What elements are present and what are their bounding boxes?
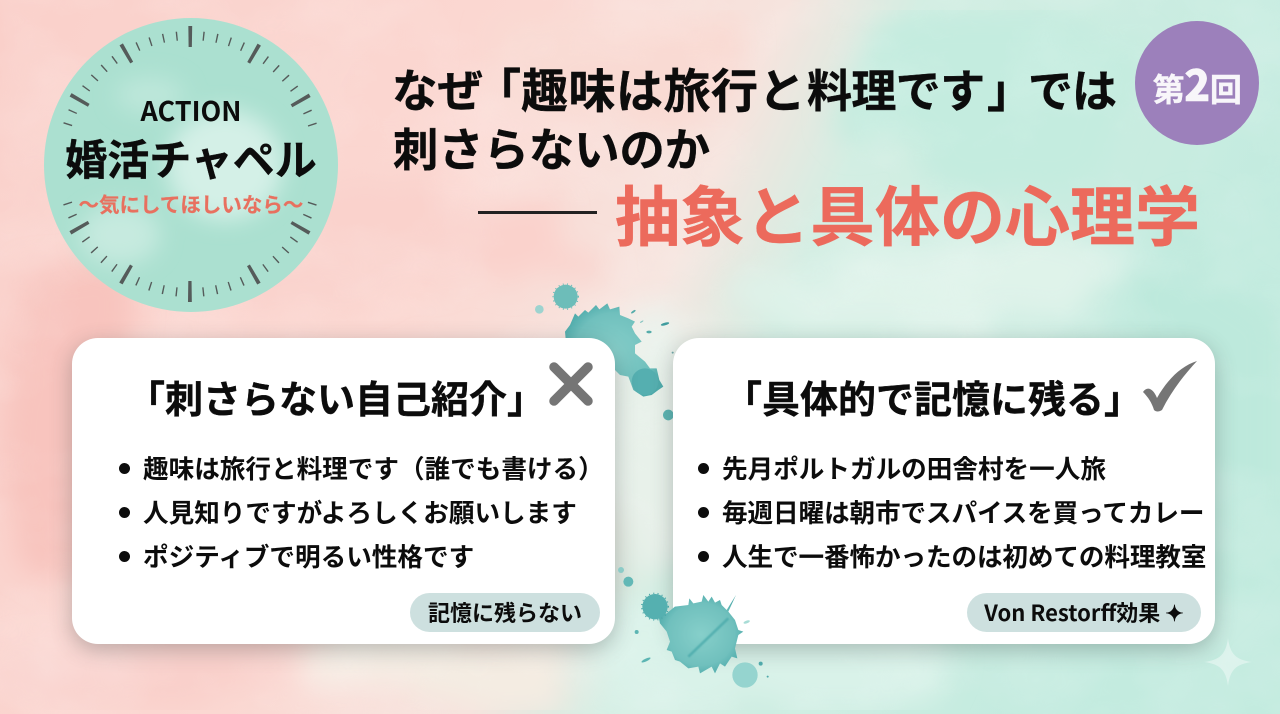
- title: line 1: では: [1028, 55, 1116, 120]
- bullet text 2: 毎週日曜は朝市でスパイスを買ってカレー: [722, 493, 1204, 530]
- title: line 1: 趣味は旅行と: [521, 53, 806, 122]
- bullet text 2: 人見知りですがよろしくお願いします: [143, 493, 577, 530]
- bullet text 3: 人生で一番怖かったのは初めての料理教室: [722, 537, 1206, 574]
- title: line 2: 刺さらないのか: [393, 114, 710, 180]
- tag: 記憶に残らない: [410, 593, 600, 632]
- title: line 1: [392, 53, 1116, 122]
- title: line 1: 料理です: [807, 55, 985, 120]
- tag: Von Restorff効果: Von Restorff効果 ✦: [984, 596, 1184, 628]
- panel heading: 「刺さらない自己紹介」: [127, 369, 545, 424]
- splatter: upper teal ink blot behind the cards: [535, 283, 674, 420]
- episode badge: 第2回: [1135, 21, 1259, 145]
- divider dash before subtitle: [478, 211, 597, 214]
- badge label: 第2回: [1153, 52, 1241, 114]
- panel: concrete and memorable self introduction: [673, 338, 1215, 644]
- tag: 記憶に残らない: 記憶に残らない: [428, 596, 582, 628]
- title: line 1: 」: [987, 55, 1033, 121]
- bullet list: [698, 449, 1206, 574]
- logo text: ACTION: ACTION: [140, 90, 242, 129]
- bullet mark 1: [698, 463, 709, 474]
- panel heading: 「具体的で記憶に残る」: [724, 369, 1142, 424]
- bullet mark 3: [119, 551, 130, 562]
- logo text: 婚活チャペル: 婚活チャペル: [65, 127, 317, 188]
- icon: check mark: [1143, 361, 1197, 412]
- title: line 1: なぜ: [392, 55, 483, 121]
- bullet mark 2: [698, 507, 709, 518]
- clock badge: ACTION 婚活チャペル logo: [44, 18, 338, 312]
- splatter: lower teal ink blot over the card corner: [618, 567, 769, 688]
- bullet text 1: 趣味は旅行と料理です（誰でも書ける）: [143, 449, 604, 486]
- bullet mark 3: [698, 551, 709, 562]
- bullet text 1: 先月ポルトガルの田舎村を一人旅: [722, 449, 1106, 486]
- subtitle: 抽象と具体の心理学: 抽象と具体の心理学: [615, 165, 1200, 259]
- bullet mark 2: [119, 507, 130, 518]
- bullet list: [119, 449, 604, 574]
- tag: Von Restorff効果: [967, 593, 1201, 632]
- panel: non-memorable self introduction: [72, 338, 615, 644]
- icon: cross: [549, 362, 593, 406]
- title: line 1: 「: [475, 55, 521, 121]
- icon: faint sparkle: [1206, 640, 1250, 685]
- bullet mark 1: [119, 463, 130, 474]
- bullet text 3: ポジティブで明るい性格です: [143, 537, 474, 574]
- clock dial with tick marks: [44, 18, 338, 312]
- logo text: 気にしてほしいなら: ～気にしてほしいなら～: [79, 188, 303, 218]
